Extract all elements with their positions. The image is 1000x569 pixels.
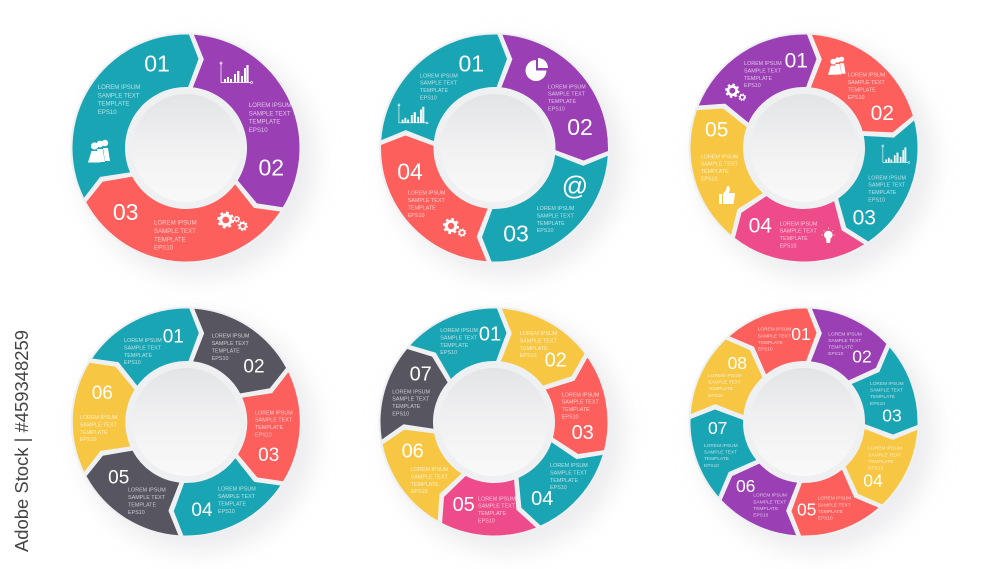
segment 03: SAMPLE TEXT [154, 228, 196, 235]
segment 08: LOREM IPSUM [708, 373, 742, 379]
segment 01: TEMPLATE [440, 343, 469, 349]
segment 04: SAMPLE TEXT [218, 494, 256, 500]
segment 06: EPS10 [411, 489, 427, 495]
segment 04: SAMPLE TEXT [868, 452, 901, 458]
segment 01: 01 [163, 327, 184, 348]
segment 04: EPS10 [408, 213, 424, 219]
segment 05: SAMPLE TEXT [818, 502, 851, 508]
segment 05 [429, 459, 536, 560]
centre disc [440, 368, 548, 476]
segment 04: LOREM IPSUM [868, 446, 902, 452]
segment 04: SAMPLE TEXT [780, 229, 817, 235]
segment 02: TEMPLATE [548, 99, 576, 105]
segment 02 [190, 309, 289, 396]
segment 06: SAMPLE TEXT [411, 474, 448, 480]
segment 05: 05 [453, 494, 475, 516]
segment 05: SAMPLE TEXT [128, 495, 166, 501]
segment 06 [41, 350, 157, 472]
segment 01: LOREM IPSUM [124, 338, 162, 344]
segment 03: 03 [882, 406, 902, 426]
segment 05: EPS10 [128, 510, 145, 516]
segment 05: 05 [108, 468, 129, 489]
segment 03: 03 [113, 199, 138, 225]
segment 02 [808, 309, 888, 382]
segment 05: EPS10 [478, 518, 495, 524]
segment 07: TEMPLATE [704, 456, 729, 462]
icon: pie chart [526, 58, 548, 81]
segment 04: LOREM IPSUM [218, 487, 256, 493]
segment 05: TEMPLATE [818, 509, 843, 515]
icon: people [88, 140, 110, 162]
segment 03: TEMPLATE [870, 394, 895, 400]
segment 08: SAMPLE TEXT [708, 380, 741, 386]
segment 07: LOREM IPSUM [704, 443, 738, 449]
segment 02 [498, 309, 587, 388]
icon: people [828, 57, 846, 75]
segment 03: EPS10 [537, 228, 553, 234]
chart: three-step cycle [33, 22, 316, 305]
segment 06: EPS10 [80, 437, 96, 443]
segment 05: 05 [705, 119, 728, 142]
segment 03 [838, 348, 941, 451]
chart: five-step cycle [649, 7, 941, 301]
segment 01: SAMPLE TEXT [420, 81, 458, 87]
centre disc [750, 94, 858, 202]
segment 03: LOREM IPSUM [537, 206, 575, 212]
segment 03: 03 [572, 422, 594, 444]
segment 01: SAMPLE TEXT [440, 335, 478, 341]
segment 07: SAMPLE TEXT [704, 450, 737, 456]
segment 08: 08 [728, 353, 747, 373]
segment 08: TEMPLATE [708, 386, 733, 392]
segment 01: TEMPLATE [744, 76, 772, 82]
segment 03: TEMPLATE [868, 190, 897, 196]
segment 04: LOREM IPSUM [780, 221, 818, 227]
segment 02: LOREM IPSUM [848, 73, 886, 79]
segment 03: EPS10 [255, 432, 272, 438]
segment 01: LOREM IPSUM [744, 61, 782, 67]
chart: eight-step cycle [667, 285, 941, 559]
segment 01: SAMPLE TEXT [758, 333, 791, 339]
segment 04: TEMPLATE [218, 502, 246, 508]
segment 03 [79, 120, 280, 305]
segment 03 [481, 150, 608, 267]
segment 01: EPS10 [744, 83, 761, 89]
segment 05: LOREM IPSUM [128, 488, 166, 494]
segment 05: EPS10 [701, 176, 717, 182]
segment 03: TEMPLATE [562, 407, 590, 413]
icon: bar chart [398, 104, 428, 124]
segment 06: 06 [736, 476, 755, 496]
segment 06 [720, 462, 800, 535]
segment 02: SAMPLE TEXT [828, 338, 861, 344]
segment 02: 02 [259, 155, 284, 181]
segment 03: LOREM IPSUM [255, 410, 293, 416]
icon: gears [218, 213, 247, 230]
icon: bar chart [882, 145, 910, 163]
segment 03 [824, 121, 941, 246]
segment 01: 01 [144, 51, 170, 77]
segment 01: TEMPLATE [98, 101, 129, 108]
segment 03: LOREM IPSUM [154, 220, 197, 227]
segment 03: 03 [503, 221, 529, 247]
segment 08 [691, 338, 764, 418]
segment 02: LOREM IPSUM [520, 331, 558, 337]
segment 01: EPS10 [124, 360, 141, 366]
segment 02 [185, 35, 305, 208]
segment 01 [33, 22, 233, 198]
segment 05 [775, 456, 878, 559]
segment 01: 01 [785, 49, 808, 72]
segment 03: 03 [853, 206, 876, 229]
segment 02: EPS10 [848, 95, 864, 101]
segment 02: EPS10 [249, 127, 268, 134]
segment 05: 05 [797, 499, 816, 519]
icon: light bulb [822, 228, 835, 243]
segment 02: 02 [852, 347, 872, 367]
segment 06: TEMPLATE [753, 506, 778, 512]
segment 05: LOREM IPSUM [818, 496, 851, 502]
segment 01: TEMPLATE [758, 340, 783, 346]
segment 02: LOREM IPSUM [548, 84, 586, 90]
segment 02: SAMPLE TEXT [249, 110, 291, 117]
segment 04 [375, 134, 493, 261]
segment 03 [215, 372, 331, 494]
segment 03: SAMPLE TEXT [255, 418, 293, 424]
segment 03: TEMPLATE [537, 221, 565, 227]
segment 01: EPS10 [420, 96, 437, 102]
segment 06: 06 [92, 383, 113, 404]
segment 03: SAMPLE TEXT [562, 400, 599, 406]
segment 06: TEMPLATE [411, 482, 439, 488]
segment 04: TEMPLATE [550, 478, 578, 484]
segment 02 [496, 35, 614, 162]
segment 04: 04 [531, 488, 553, 510]
segment 03: EPS10 [562, 414, 578, 420]
segment 07: EPS10 [392, 412, 409, 418]
segment 01 [699, 7, 824, 139]
segment 08: EPS10 [708, 393, 723, 399]
segment 05: SAMPLE TEXT [701, 162, 738, 168]
segment 03 [527, 358, 637, 470]
segment 01: EPS10 [758, 346, 773, 352]
segment 06: SAMPLE TEXT [80, 422, 117, 428]
segment 04: 04 [397, 158, 423, 184]
segment 02: SAMPLE TEXT [520, 338, 557, 344]
segment 01: LOREM IPSUM [440, 328, 479, 334]
segment 06: TEMPLATE [80, 430, 108, 436]
segment 04: EPS10 [550, 485, 567, 491]
segment 03: SAMPLE TEXT [537, 213, 574, 219]
icon: gears [726, 85, 746, 101]
segment 01: SAMPLE TEXT [124, 345, 162, 351]
segment 01: EPS10 [98, 109, 117, 116]
icon: gears [444, 219, 466, 236]
segment 02 [807, 35, 917, 134]
segment 04 [725, 166, 864, 301]
segment 05: SAMPLE TEXT [478, 504, 516, 510]
segment 01: SAMPLE TEXT [744, 68, 782, 74]
segment 06: LOREM IPSUM [753, 493, 787, 499]
icon: at sign: @ [562, 170, 588, 200]
segment 03: 03 [258, 445, 279, 466]
segment 04: 04 [191, 500, 213, 521]
segment 02: TEMPLATE [212, 348, 240, 354]
centre disc [132, 94, 240, 202]
segment 01 [730, 285, 833, 388]
segment 07: EPS10 [704, 463, 719, 469]
segment 02: 02 [545, 349, 567, 371]
segment 04: EPS10 [218, 509, 235, 515]
chart: four-step cycle [375, 29, 624, 278]
segment 05 [649, 96, 790, 235]
segment 07 [367, 343, 455, 439]
segment 01: LOREM IPSUM [758, 327, 791, 333]
segment 01: 01 [479, 323, 501, 345]
segment 03: EPS10 [870, 401, 885, 407]
segment 02: EPS10 [212, 356, 228, 362]
segment 04: TEMPLATE [780, 236, 808, 242]
segment 02: EPS10 [548, 106, 565, 112]
segment 03: LOREM IPSUM [562, 392, 600, 398]
segment 01 [92, 279, 213, 403]
segment 04: EPS10 [868, 466, 884, 472]
segment 01: 01 [459, 51, 484, 77]
segment 02: TEMPLATE [520, 346, 548, 352]
segment 04: 04 [863, 471, 883, 491]
segment 04: 04 [749, 215, 772, 238]
segment 02: TEMPLATE [249, 119, 280, 126]
segment 03: SAMPLE TEXT [870, 388, 903, 394]
segment 01: EPS10 [440, 350, 457, 356]
segment 05: TEMPLATE [128, 502, 156, 508]
segment 06: EPS10 [753, 512, 769, 518]
segment 05: LOREM IPSUM [478, 496, 516, 502]
segment 06: LOREM IPSUM [80, 415, 118, 421]
segment 04 [160, 441, 280, 565]
segment 01: SAMPLE TEXT [98, 92, 140, 99]
segment 07 [667, 393, 770, 496]
stock credit: Adobe Stock | #459348259 [12, 330, 32, 552]
segment 07: 07 [410, 363, 432, 385]
segment 02: EPS10 [520, 353, 536, 359]
segment 03: LOREM IPSUM [868, 175, 907, 181]
segment 02: SAMPLE TEXT [848, 80, 885, 86]
segment 05: LOREM IPSUM [701, 154, 739, 160]
segment 06: SAMPLE TEXT [753, 499, 786, 505]
segment 05: TEMPLATE [701, 169, 729, 175]
segment 04: SAMPLE TEXT [408, 198, 445, 204]
segment 04: LOREM IPSUM [550, 463, 588, 469]
centre disc [132, 368, 240, 476]
segment 02: 02 [567, 114, 593, 140]
segment 06: 06 [402, 441, 424, 463]
segment 01 [381, 29, 508, 146]
segment 02: LOREM IPSUM [828, 331, 862, 337]
segment 03: LOREM IPSUM [870, 381, 904, 387]
segment 02: LOREM IPSUM [212, 334, 250, 340]
segment 02: TEMPLATE [848, 88, 876, 94]
segment 06: LOREM IPSUM [411, 467, 449, 473]
segment 02: LOREM IPSUM [249, 102, 291, 109]
centre disc [750, 368, 858, 476]
segment 07: SAMPLE TEXT [392, 397, 430, 403]
centre disc [440, 94, 548, 202]
segment 02: SAMPLE TEXT [548, 92, 586, 98]
segment 04: TEMPLATE [408, 206, 436, 212]
segment 05 [84, 448, 183, 535]
chart: six-step cycle [41, 279, 331, 565]
segment 03: SAMPLE TEXT [868, 183, 906, 189]
segment 02: EPS10 [828, 351, 844, 357]
segment 03: TEMPLATE [255, 425, 283, 431]
segment 01: TEMPLATE [420, 88, 448, 94]
segment 01 [410, 282, 523, 395]
segment 02: TEMPLATE [828, 344, 853, 350]
segment 06 [363, 414, 474, 521]
icon: bar chart [220, 62, 253, 84]
segment 07: LOREM IPSUM [392, 389, 431, 395]
segment 01: LOREM IPSUM [420, 73, 458, 79]
segment 03: EPS10 [154, 245, 174, 252]
segment 05: TEMPLATE [478, 511, 506, 517]
segment 04: SAMPLE TEXT [550, 470, 588, 476]
segment 04 [508, 435, 603, 537]
segment 01: 01 [791, 324, 811, 344]
chart: seven-step cycle [363, 282, 637, 560]
segment 01: LOREM IPSUM [98, 84, 140, 91]
segment 03: TEMPLATE [154, 236, 186, 243]
segment 04 [844, 426, 917, 506]
segment 01: TEMPLATE [124, 353, 152, 359]
segment 04: EPS10 [780, 244, 796, 250]
segment 03: EPS10 [868, 198, 885, 204]
segment 05: EPS10 [818, 516, 833, 522]
icon: thumbs up [719, 186, 735, 204]
segment 02: SAMPLE TEXT [212, 341, 249, 347]
segment 04: TEMPLATE [868, 459, 893, 465]
segment 02: 02 [871, 102, 894, 125]
segment 04: LOREM IPSUM [408, 191, 446, 197]
segment 07: 07 [708, 418, 727, 438]
segment 02: 02 [243, 356, 265, 377]
segment 07: TEMPLATE [392, 404, 421, 410]
